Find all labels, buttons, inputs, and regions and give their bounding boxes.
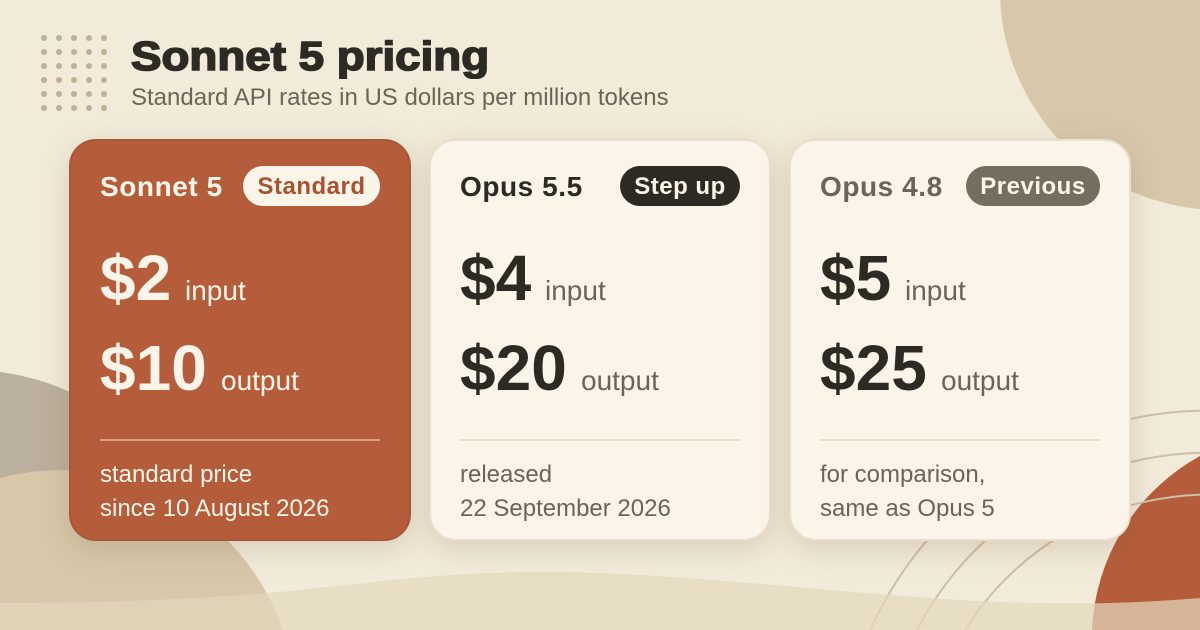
note line 1: released: [460, 461, 552, 488]
note line 1: for comparison,: [820, 461, 985, 488]
input label: input: [185, 275, 246, 306]
input price: $5: [820, 242, 891, 314]
input label: input: [545, 275, 606, 306]
concentric arcs: [870, 411, 1200, 630]
badge: Previous: Previous: [980, 173, 1086, 200]
output price: $10: [100, 332, 207, 404]
panel: Opus 4.8: [789, 139, 1131, 541]
card name: Opus 4.8: [820, 171, 943, 202]
badge: Step up: Step up: [634, 173, 726, 200]
output label: output: [221, 365, 299, 396]
input price: $2: [100, 242, 171, 314]
card name: Opus 5.5: [460, 171, 583, 202]
dot grid: [41, 35, 107, 111]
panel: Sonnet 5: [69, 139, 411, 541]
shape: left tan circle: [0, 470, 283, 630]
badge: Standard: Standard: [257, 173, 366, 200]
output label: output: [941, 365, 1019, 396]
panel: Opus 5.5: [429, 139, 771, 541]
note line 2: same as Opus 5: [820, 495, 995, 522]
shape: rust circle: [1092, 456, 1200, 630]
badge: Step up: [620, 166, 740, 206]
input price: $4: [460, 242, 531, 314]
badge: Standard: [243, 166, 380, 206]
shape: left grey circle: [0, 372, 210, 630]
title: Sonnet 5 pricing: [131, 33, 489, 79]
subtitle: Standard API rates in US dollars per million tokens: [131, 84, 669, 111]
note line 2: since 10 August 2026: [100, 495, 330, 522]
note line 1: standard price: [100, 461, 252, 488]
note line 2: 22 September 2026: [460, 495, 671, 522]
output price: $25: [820, 332, 927, 404]
input label: input: [905, 275, 966, 306]
badge: Previous: [966, 166, 1100, 206]
output label: output: [581, 365, 659, 396]
shape: bottom wave: [0, 572, 1200, 630]
card name: Sonnet 5: [100, 171, 223, 202]
shape: top right circle: [1000, 0, 1200, 209]
output price: $20: [460, 332, 567, 404]
